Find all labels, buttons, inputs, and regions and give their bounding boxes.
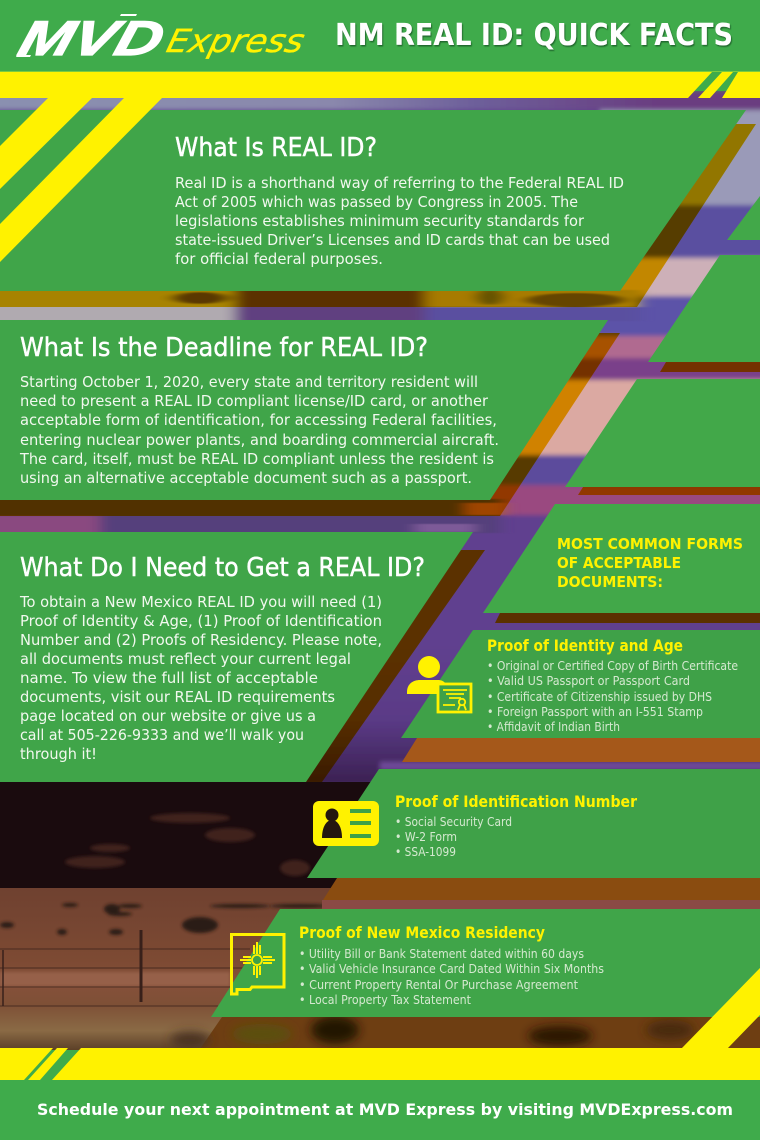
document list: • Utility Bill or Bank Statement dated within 60 days <box>299 947 584 961</box>
body text <box>175 174 624 268</box>
document list <box>487 659 738 734</box>
footer <box>0 1048 760 1140</box>
heading: What Is REAL ID? <box>175 133 377 163</box>
panel: proof of new mexico residency <box>211 909 760 1017</box>
document list: • W-2 Form <box>395 830 457 844</box>
heading: What Do I Need to Get a REAL ID? <box>20 553 425 583</box>
heading: DOCUMENTS: <box>557 573 663 591</box>
body text: for official federal purposes. <box>175 250 383 268</box>
field <box>0 888 760 1050</box>
icon: person with certificate <box>407 656 471 712</box>
panel shape <box>211 909 760 1017</box>
footer green bar <box>0 1080 760 1140</box>
panel: proof of identification number <box>307 769 760 878</box>
logo: MVD Express: Express <box>163 22 308 60</box>
document list: • SSA-1099 <box>395 845 456 859</box>
logo: MVD Express: MVD <box>13 11 171 66</box>
body text: The card, itself, must be REAL ID compliant unless the resident is <box>19 450 494 468</box>
document list: • Original or Certified Copy of Birth Certificate <box>487 659 738 673</box>
heading: OF ACCEPTABLE <box>557 554 681 572</box>
logo: MVD Express <box>13 11 308 66</box>
body text: acceptable form of identification, for accessing Federal facilities, <box>20 411 497 429</box>
body text: documents, visit our REAL ID requirements <box>20 688 335 706</box>
heading <box>557 535 743 591</box>
call to action: Schedule your next appointment at MVD Express by visiting MVDExpress.com <box>37 1100 733 1119</box>
document list: • Affidavit of Indian Birth <box>487 720 620 734</box>
shadow bands behind panels <box>0 124 760 909</box>
body text: using an alternative acceptable document such as a passport. <box>20 469 472 487</box>
panel: most common forms heading <box>483 504 760 613</box>
body text: Starting October 1, 2020, every state and territory resident will <box>20 373 478 391</box>
document list: • Valid US Passport or Passport Card <box>487 674 690 688</box>
document list: • Certificate of Citizenship issued by DHS <box>487 690 712 704</box>
header bar <box>0 0 760 91</box>
panel shape <box>0 532 473 782</box>
body text <box>19 593 382 763</box>
panel: what do i need <box>0 532 473 782</box>
document list: • Current Property Rental Or Purchase Agreement <box>299 978 578 992</box>
heading: Proof of New Mexico Residency <box>299 923 545 942</box>
body text: Act of 2005 which was passed by Congress in 2005. The <box>175 193 578 211</box>
bottom yellow band <box>0 1048 760 1080</box>
yellow diagonal stripe bottom right <box>681 968 760 1049</box>
body text: through it! <box>20 745 97 763</box>
panel shape <box>401 630 760 738</box>
body text: call at 505-226-9333 and we’ll walk you <box>20 726 304 744</box>
sky strips below first and second panels <box>0 289 640 533</box>
body text: legislations establishes minimum security standards for <box>175 212 585 230</box>
body text: Real ID is a shorthand way of referring to the Federal REAL ID <box>175 174 624 192</box>
body text: entering nuclear power plants, and boarding commercial aircraft. <box>20 431 499 449</box>
body text: all documents must reflect your current legal <box>20 650 351 668</box>
document list: • Social Security Card <box>395 815 512 829</box>
body text: state-issued Driver’s Licenses and ID cards that can be used <box>175 231 610 249</box>
panel: what is the deadline <box>0 320 608 500</box>
heading: What Is the Deadline for REAL ID? <box>20 333 428 363</box>
icon: new mexico with zia symbol <box>232 934 284 994</box>
top yellow band <box>0 71 760 98</box>
body text: name. To view the full list of acceptable <box>20 669 318 687</box>
decorative yellow diagonal stripes <box>0 98 162 262</box>
body text: Number and (2) Proofs of Residency. Please note, <box>20 631 382 649</box>
green gap behind slashes <box>30 1058 80 1080</box>
panel shape <box>0 110 746 291</box>
panel: what is real id <box>0 98 746 291</box>
heading: MOST COMMON FORMS <box>557 535 743 553</box>
dark hill <box>0 782 760 890</box>
heading: Proof of Identity and Age <box>487 636 683 655</box>
document list: • Valid Vehicle Insurance Card Dated Within Six Months <box>299 962 604 976</box>
panel shape <box>307 769 760 878</box>
document list <box>299 947 604 1007</box>
body text: Proof of Identity & Age, (1) Proof of Identification <box>20 612 382 630</box>
panel shape <box>483 504 760 613</box>
body text: page located on our website or give us a <box>20 707 316 725</box>
document list: • Foreign Passport with an I-551 Stamp <box>487 705 703 719</box>
right decorative panels <box>565 196 760 487</box>
body text: need to present a REAL ID compliant license/ID card, or another <box>20 392 489 410</box>
body text: To obtain a New Mexico REAL ID you will need (1) <box>19 593 382 611</box>
grass strip below residency panel <box>170 1016 760 1049</box>
document list <box>395 815 512 859</box>
heading: Proof of Identification Number <box>395 792 637 811</box>
document list: • Local Property Tax Statement <box>299 993 471 1007</box>
panel: proof of identity and age <box>401 630 760 738</box>
icon: id card <box>313 801 379 846</box>
body text <box>19 373 499 487</box>
panel shape <box>0 320 608 500</box>
